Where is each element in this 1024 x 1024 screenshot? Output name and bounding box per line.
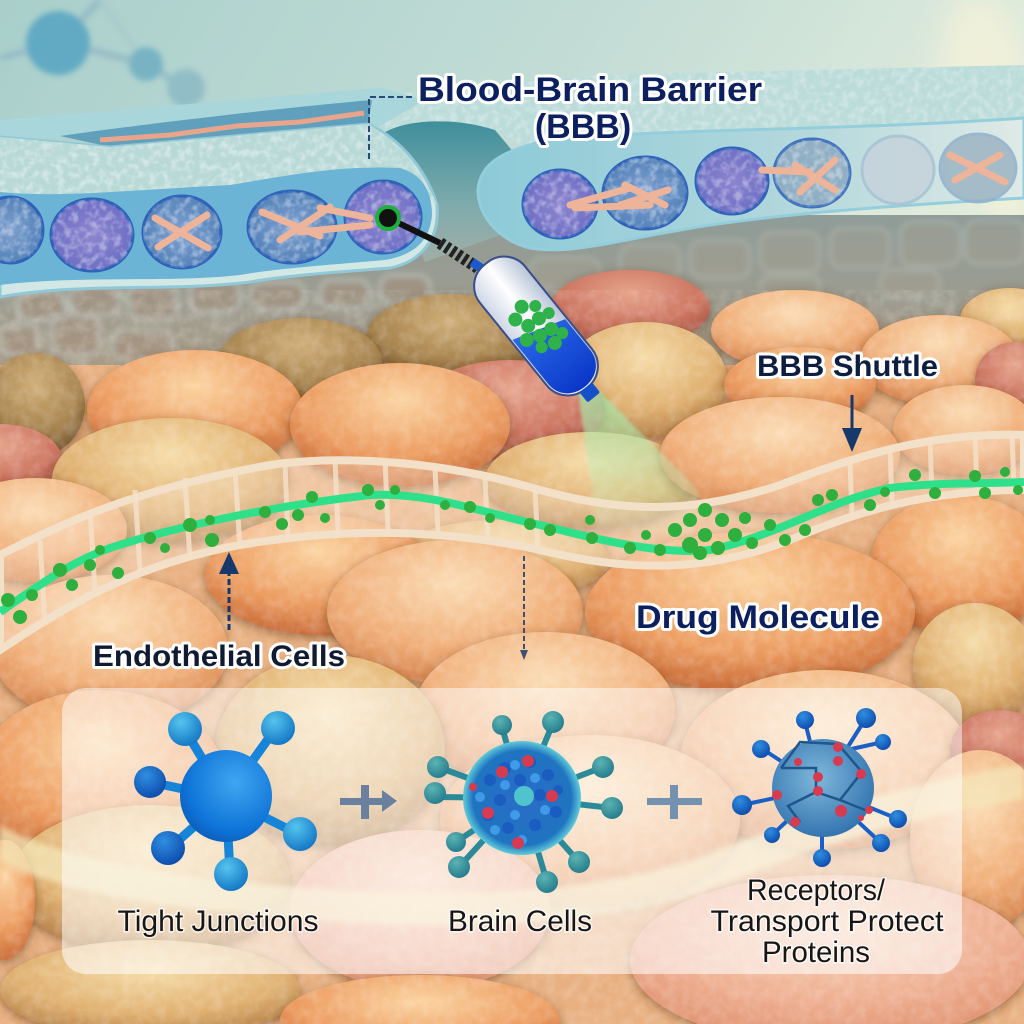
cells: right barrier cells [523,134,1016,238]
pointer: drug molecule release [520,556,528,660]
legend panel [62,688,962,974]
title: Blood-Brain Barrier [418,71,762,109]
pointer arrow: BBB Shuttle [842,395,862,452]
barrier gap [385,121,520,262]
right barrier top surface [385,65,1024,146]
label: Endothelial Cells: Endothelial Cells [93,640,345,673]
bloodstream line [0,482,1024,612]
title pointer line [369,97,412,160]
cream lower vessel band [0,765,1024,925]
drug release light beam [578,392,700,535]
plus sign [647,785,702,819]
icon: brain cells [424,711,623,893]
background: pale teal sky [0,0,1024,320]
brain cell blobs: front rows [0,495,1024,1024]
capillary vessel with endothelial wall [0,434,1024,650]
label: BBB Shuttle: BBB Shuttle [757,350,938,383]
BBB shuttle capsule [463,246,616,416]
caption: receptors / transport proteins [710,874,944,969]
brain cell blobs: back rows [0,270,1024,600]
green drug molecules in vessel [1,467,1023,624]
arrow: plus to brain cells [340,785,397,819]
left barrier slab [0,88,440,297]
network tissue below the barrier [0,215,1024,365]
background molecule, blurred [0,0,240,107]
tight junction strands [155,155,1005,248]
label: Drug Molecule: Drug Molecule [636,599,880,635]
shuttle wire [377,207,490,274]
icon: receptors and transport proteins [732,708,907,867]
icon: tight junctions [134,711,317,891]
title [418,71,762,146]
right barrier slab [478,118,1024,250]
pointer arrow: Endothelial Cells [219,552,239,630]
sunlight ray [930,0,1024,260]
cells: left barrier cells [0,181,421,271]
caption: brain cells: Brain Cells [448,905,592,938]
caption: receptors / transport proteins: Proteins [762,936,870,969]
caption: tight junctions: Tight Junctions [118,905,318,938]
caption: receptors / transport proteins: Transport Protect [710,905,944,938]
caption: receptors / transport proteins: Receptors/ [747,874,886,907]
title: (BBB) [535,108,631,146]
